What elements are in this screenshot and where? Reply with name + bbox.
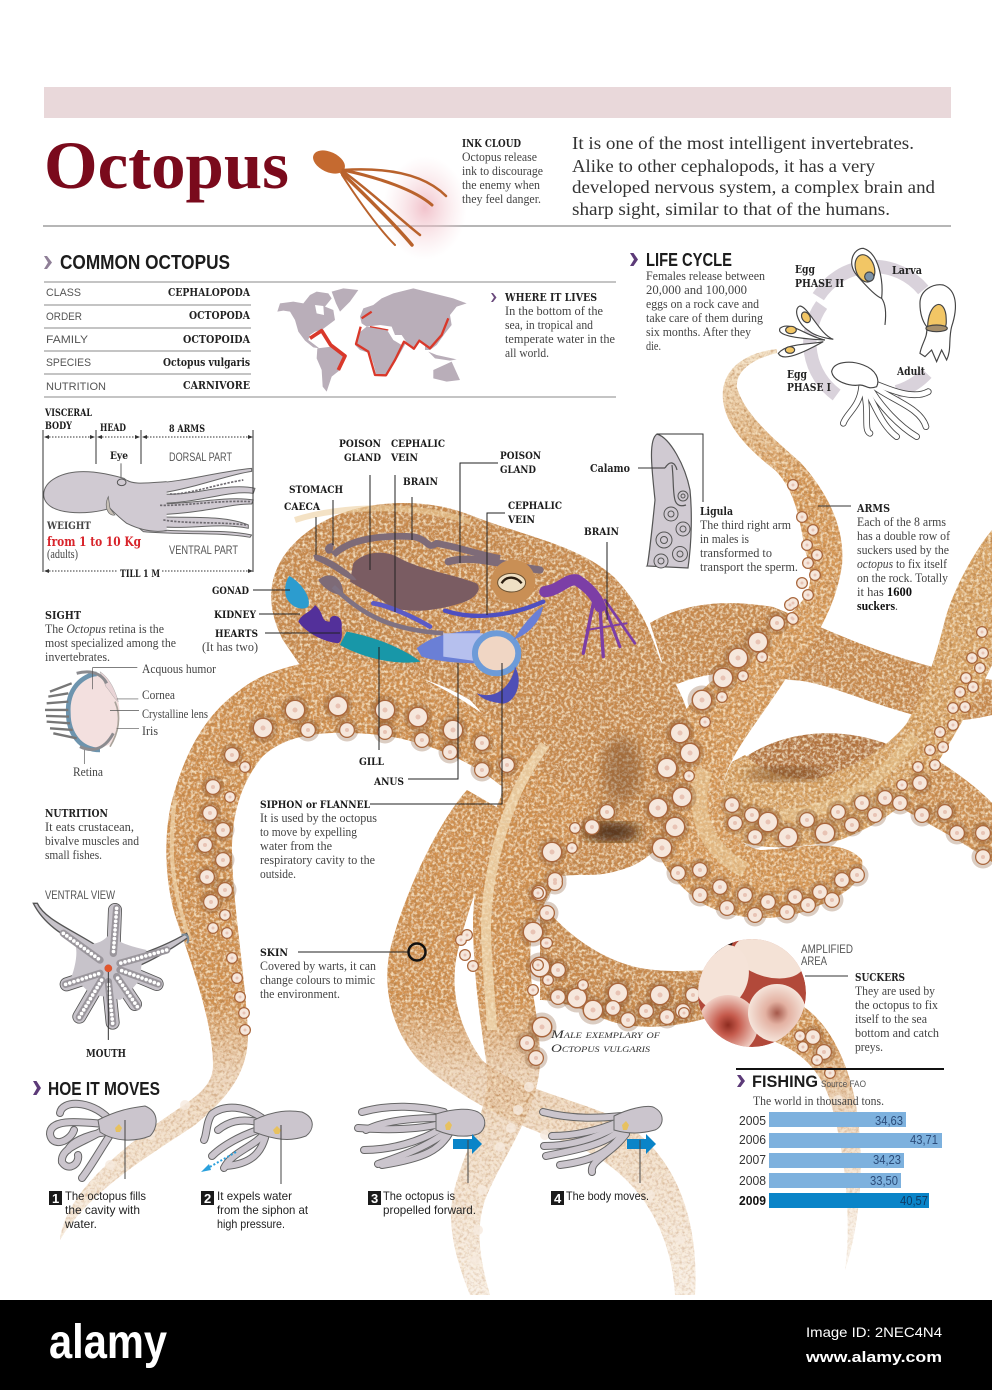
step 2: It expels water: [217, 1189, 292, 1203]
anatomy labels: CEPHALIC: [508, 500, 562, 512]
callout: skin: the environment.: [260, 987, 340, 1001]
anatomy labels: POISON: [339, 438, 381, 450]
step 2: 2: [204, 1191, 211, 1206]
step 1: 1: [52, 1191, 59, 1206]
anatomy labels: POISON: [500, 450, 541, 462]
taxonomy table: ORDER: [46, 311, 82, 323]
bar chart: fishing: 40,57: [900, 1194, 928, 1208]
diagram: eye: Cornea: [142, 688, 175, 702]
callout: siphon: to move by expelling: [260, 825, 358, 839]
step 1: water.: [64, 1217, 97, 1231]
step 3: 3: [371, 1191, 378, 1206]
intro paragraph: Alike to other cephalopods, it has a very: [572, 156, 875, 176]
callout: arms: it has 1600: [857, 585, 912, 599]
intro paragraph: sharp sight, similar to that of the humans.: [572, 199, 890, 219]
organ: poison gland / stomach: [350, 553, 479, 611]
callout: suckers: AMPLIFIED: [801, 944, 853, 956]
callout: arms: Each of the 8 arms: [857, 515, 946, 529]
organ: poison gland tube: [448, 559, 540, 570]
diagram: ligula: transport the sperm.: [700, 560, 798, 574]
organ: siphon ring: [475, 633, 518, 673]
diagram: life cycle: Adult: [896, 365, 926, 378]
organ: vein tube: [333, 587, 443, 633]
anatomy labels: GLAND: [344, 452, 381, 464]
callout: arms: has a double row of: [857, 529, 951, 543]
taxonomy table: CLASS: [46, 287, 81, 299]
step 3: propelled forward.: [383, 1203, 476, 1217]
rule under header: [43, 225, 951, 227]
diagram: life cycle: Egg: [787, 368, 807, 381]
diagram: size side view: HEAD: [100, 422, 126, 434]
anatomy labels: VEIN: [507, 514, 535, 526]
callout: where it lives: sea, in tropical and: [505, 318, 594, 332]
step 1: The octopus fills: [65, 1189, 146, 1203]
footer bar: alamy: [49, 1316, 167, 1369]
callout: skin: change colours to mimic: [260, 973, 375, 987]
organ: cephalic vein: [445, 602, 543, 616]
diagram: size side view: 8 ARMS: [169, 423, 205, 435]
callout: ink cloud: INK CLOUD: [462, 137, 521, 150]
diagram: eye: Retina: [73, 765, 103, 779]
anatomy labels: CAECA: [284, 501, 321, 513]
text: nutrition: [45, 807, 140, 862]
title: Octopus: [44, 127, 289, 203]
callout: ink cloud: Octopus release: [462, 150, 537, 164]
organ: gonad: [285, 576, 309, 609]
heading and text: life cycle: [630, 250, 766, 353]
callout: siphon: outside.: [260, 867, 296, 881]
diagram: eye: Acquous humor: [142, 662, 217, 676]
stage: larva: [920, 285, 955, 362]
anatomy labels: BRAIN: [403, 476, 438, 488]
callout: arms: [818, 502, 951, 613]
diagram: ligula: [590, 434, 798, 574]
diagram: size side view: WEIGHT: [46, 520, 91, 532]
diagram: ventral view: VENTRAL VIEW: [45, 890, 115, 902]
intro paragraph: developed nervous system, a complex brain and: [572, 177, 935, 197]
anatomy labels: STOMACH: [289, 484, 343, 496]
caption: male exemplary: Octopus vulgaris: [551, 1041, 650, 1055]
heading: common octopus: COMMON OCTOPUS: [60, 252, 230, 274]
heading and text: life cycle: eggs on a rock cave and: [646, 297, 760, 311]
bar chart: fishing: 43,71: [910, 1133, 938, 1147]
organ: brain tube: [333, 536, 500, 558]
taxonomy table: OCTOPODA: [189, 309, 250, 322]
internal organs: [285, 536, 635, 704]
diagram: life cycle: Egg: [795, 263, 815, 276]
text: sight: [45, 609, 176, 664]
organ: anus region: [417, 630, 480, 663]
callout: ink cloud: they feel danger.: [462, 192, 541, 206]
bar chart: fishing: 2009: [739, 1194, 766, 1208]
anatomy labels: HEARTS: [215, 628, 258, 640]
step 4: [543, 1106, 662, 1206]
bar chart: fishing: 34,63: [875, 1114, 903, 1128]
callout: skin: SKIN: [260, 947, 288, 959]
organ: eye: [491, 560, 535, 604]
callout: suckers: the octopus to fix: [855, 998, 939, 1012]
bar chart: fishing: FISHING: [752, 1072, 818, 1091]
taxonomy table: FAMILY: [46, 334, 89, 346]
step 4: The body moves.: [566, 1189, 649, 1203]
callout: where it lives: [491, 291, 615, 360]
diagram: ventral view: MOUTH: [86, 1047, 126, 1060]
diagram: ligula: transformed to: [700, 546, 772, 560]
callout: where it lives: temperate water in the: [505, 332, 615, 346]
callout: arms: suckers used by the: [857, 543, 949, 557]
taxonomy table: SPECIES: [46, 357, 91, 369]
bar chart: fishing: 33,50: [870, 1174, 898, 1188]
organ: blue vein left: [373, 603, 430, 627]
amplified sucker circle: [698, 939, 806, 1047]
callout: suckers: AREA: [801, 956, 827, 968]
step 4: 4: [554, 1191, 562, 1206]
callout: arms: ARMS: [856, 502, 890, 515]
diagram: ligula: Calamo: [590, 462, 630, 475]
callout: ink cloud: ink to discourage: [462, 164, 543, 178]
diagram: life cycle: [778, 248, 955, 437]
footer bar: www.alamy.com: [805, 1350, 942, 1366]
bar chart: fishing: 34,23: [873, 1153, 901, 1167]
heading and text: life cycle: take care of them during: [646, 311, 764, 325]
stage: adult: [832, 362, 928, 437]
heading and text: life cycle: 20,000 and 100,000: [646, 283, 747, 297]
step 3: [358, 1107, 485, 1217]
diagram: size side view: (adults): [47, 547, 78, 561]
bar chart: fishing: Source FAO: [821, 1079, 866, 1090]
anatomy labels: GILL: [359, 756, 385, 768]
callout: skin: [260, 944, 426, 1001]
diagram: ligula: Ligula: [700, 505, 733, 518]
diagram: size side view: from 1 to 10 Kg: [47, 535, 141, 550]
bar chart: fishing: 2005: [739, 1114, 766, 1128]
heading: how it moves: HOE IT MOVES: [48, 1079, 160, 1099]
cycle ring: [810, 266, 927, 395]
callout: arms: octopus to fix itself: [857, 557, 948, 571]
anatomy labels: KIDNEY: [214, 609, 256, 621]
callout: siphon: SIPHON or FLANNEL: [260, 799, 371, 811]
callout: suckers: bottom and catch: [855, 1026, 940, 1040]
anatomy labels: VEIN: [390, 452, 418, 464]
stage: egg phase I: [778, 306, 833, 357]
callout: siphon: water from the: [260, 839, 332, 853]
step 2: high pressure.: [217, 1217, 285, 1231]
callout: siphon: [260, 799, 377, 881]
bar chart: fishing: 2008: [739, 1174, 766, 1188]
heading and text: life cycle: LIFE CYCLE: [646, 250, 732, 270]
taxonomy table: OCTOPOIDA: [183, 333, 250, 346]
step 1: [49, 1104, 156, 1231]
diagram: life cycle: PHASE I: [787, 381, 831, 394]
illustration: octopus with ink cloud: [309, 146, 467, 260]
organ: gill: [340, 632, 421, 663]
callout: suckers: SUCKERS: [855, 971, 905, 984]
diagram: size side view: Eye: [110, 450, 128, 462]
taxonomy table: NUTRITION: [46, 381, 106, 393]
taxonomy table: CEPHALOPODA: [168, 286, 250, 299]
callout: where it lives: In the bottom of the: [505, 304, 603, 318]
text: sight: most specialized among the: [45, 636, 176, 650]
step 2: [201, 1108, 312, 1231]
text: nutrition: NUTRITION: [45, 807, 108, 820]
diagram: life cycle: Larva: [892, 264, 922, 277]
footer bar: Image ID: 2NEC4N4: [806, 1324, 942, 1340]
world map: [277, 288, 467, 392]
diagram: eye: Iris: [142, 724, 158, 738]
callout: ink cloud: the enemy when: [462, 178, 541, 192]
taxonomy table: CARNIVORE: [183, 379, 250, 392]
bar chart: fishing: 2007: [739, 1153, 766, 1167]
header band: [44, 87, 951, 118]
footer bar: [0, 1300, 992, 1390]
intro paragraph: It is one of the most intelligent invertebrates.: [572, 133, 914, 153]
callout: where it lives: WHERE IT LIVES: [504, 291, 597, 304]
anatomy labels: (It has two): [202, 640, 258, 654]
dimension lines: [43, 430, 253, 572]
diagram: eye: Crystalline lens: [142, 707, 208, 721]
anatomy labels: [202, 438, 619, 804]
callout: suckers: itself to the sea: [855, 1012, 927, 1026]
bar chart: fishing: The world in thousand tons.: [753, 1094, 884, 1108]
bar chart: fishing: 2006: [739, 1133, 766, 1147]
callout: siphon: respiratory cavity to the: [260, 853, 375, 867]
callout: arms: on the rock. Totally: [857, 571, 949, 585]
heading and text: life cycle: six months. After they: [646, 325, 752, 339]
diagram: eye: [45, 662, 217, 779]
callout: skin: Covered by warts, it can: [260, 959, 377, 973]
anatomy labels: GONAD: [212, 585, 249, 597]
diagram: ligula: in males is: [700, 532, 749, 546]
text: sight: SIGHT: [45, 609, 82, 622]
diagram: size side view: BODY: [45, 420, 72, 432]
caption: male exemplary: [550, 1027, 660, 1055]
callout: suckers: They are used by: [855, 984, 936, 998]
diagram: size side view: VISCERAL: [44, 407, 92, 419]
anatomy labels: ANUS: [373, 776, 404, 788]
anatomy labels: CEPHALIC: [391, 438, 445, 450]
diagram: size side view: VENTRAL PART: [169, 545, 238, 557]
step 3: The octopus is: [383, 1189, 455, 1203]
heading and text: life cycle: die.: [646, 339, 661, 353]
organ: brain right: [545, 580, 635, 657]
text: nutrition: bivalve muscles and: [45, 834, 140, 848]
callout: arms: suckers.: [857, 599, 898, 613]
diagram: size side view: [43, 407, 255, 580]
diagram: ligula: The third right arm: [700, 518, 791, 532]
diagram: size side view: DORSAL PART: [169, 452, 232, 464]
intro paragraph: [572, 133, 935, 219]
diagram: size side view: TILL 1 M: [120, 568, 160, 580]
text: nutrition: It eats crustacean,: [45, 820, 134, 834]
organ: kidney and hearts: [298, 605, 342, 643]
anatomy labels: GLAND: [500, 464, 536, 476]
callout: siphon: It is used by the octopus: [260, 811, 377, 825]
callout: where it lives: all world.: [505, 346, 549, 360]
diagram: ventral view: [33, 890, 188, 1060]
anatomy labels: BRAIN: [584, 526, 619, 538]
caption: male exemplary: Male exemplary of: [550, 1027, 660, 1041]
heading and text: life cycle: Females release between: [646, 269, 766, 283]
taxonomy table: Octopus vulgaris: [163, 356, 250, 369]
organ: caeca: [313, 543, 357, 595]
text: sight: invertebrates.: [45, 650, 110, 664]
illustration: main octopus: [60, 349, 992, 1295]
callout: suckers: preys.: [855, 1040, 883, 1054]
callout: suckers: [801, 944, 940, 1054]
step 1: the cavity with: [65, 1203, 140, 1217]
text: sight: The Octopus retina is the: [45, 622, 164, 636]
taxonomy table: [44, 282, 616, 397]
bar chart: fishing: [736, 1069, 944, 1208]
text: nutrition: small fishes.: [45, 848, 102, 862]
callout: ink cloud: [462, 137, 543, 206]
diagram: life cycle: PHASE II: [795, 277, 844, 290]
stage: egg phase II: [852, 248, 886, 325]
step 2: from the siphon at: [217, 1203, 309, 1217]
